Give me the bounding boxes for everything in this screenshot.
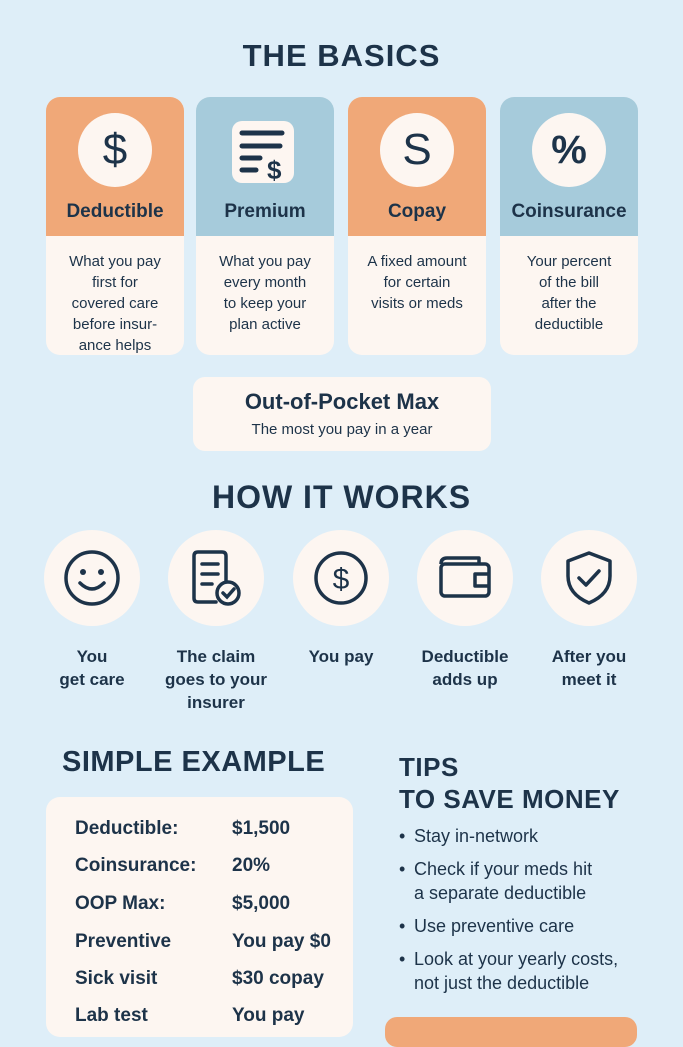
- tip 3: •: [399, 916, 405, 936]
- card: coinsurance: of the bill: [539, 274, 599, 291]
- card: premium: Premium: [224, 201, 306, 222]
- tip 2: Check if your meds hit: [414, 859, 592, 879]
- card: coinsurance: [500, 97, 638, 355]
- card: copay: S: [402, 125, 432, 174]
- row: oop max: OOP Max:: [75, 893, 165, 914]
- step: after you meet it: meet it: [562, 670, 616, 689]
- card: copay: Copay: [388, 201, 446, 222]
- step: claim: insurer: [187, 693, 245, 712]
- step: deductible adds up: adds up: [432, 670, 498, 689]
- row: lab test: [75, 1005, 304, 1026]
- card: deductible: covered care: [72, 295, 158, 312]
- row: coinsurance: [75, 855, 270, 876]
- step: claim: goes to your: [165, 670, 267, 689]
- title: the basics: THE BASICS: [243, 38, 440, 73]
- tip 4: Look at your yearly costs,: [414, 949, 618, 969]
- card: deductible: first for: [92, 274, 138, 291]
- card: premium: [196, 97, 334, 355]
- card: premium: to keep your: [224, 295, 306, 312]
- text: $1,500: [232, 818, 290, 839]
- card: premium: $: [267, 155, 282, 185]
- row: deductible: [75, 818, 290, 839]
- card: coinsurance: Your percent: [527, 253, 611, 270]
- tip 4: •: [399, 949, 405, 969]
- card: copay: [348, 97, 486, 355]
- card: copay: A fixed amount: [367, 253, 467, 270]
- orange box bottom: [385, 1017, 637, 1047]
- text: $30 copay: [232, 968, 324, 989]
- row: sick visit: [75, 968, 324, 989]
- text: You pay $0: [232, 931, 331, 952]
- row: coinsurance: Coinsurance:: [75, 855, 196, 876]
- row: sick visit: Sick visit: [75, 968, 157, 989]
- step: you pay: $: [333, 563, 350, 596]
- step: after you meet it: After you: [552, 647, 626, 666]
- card: deductible: before insur-: [73, 316, 157, 333]
- card: deductible: ance helps: [79, 337, 151, 354]
- card: deductible: $: [103, 125, 127, 174]
- panel: out-of-pocket max: [193, 377, 491, 451]
- card: premium: What you pay: [219, 253, 311, 270]
- step: you get care: get care: [59, 670, 125, 689]
- step: you pay: [293, 530, 389, 666]
- step: deductible adds up: [417, 530, 513, 689]
- panel: out-of-pocket max: Out-of-Pocket Max: [245, 389, 439, 414]
- card: deductible: [46, 97, 184, 355]
- card: coinsurance: %: [551, 128, 587, 172]
- text: You pay: [232, 1005, 304, 1026]
- title: tips: [399, 752, 620, 814]
- card: copay: visits or meds: [371, 295, 463, 312]
- step: deductible adds up: Deductible: [422, 647, 508, 666]
- step: claim: The claim: [177, 647, 255, 666]
- tip 1: •: [399, 826, 405, 846]
- tip 2: a separate deductible: [414, 883, 586, 903]
- step: claim: [165, 530, 267, 712]
- row: lab test: Lab test: [75, 1005, 148, 1026]
- step: you get care: You: [77, 647, 107, 666]
- card: coinsurance: Coinsurance: [511, 201, 627, 222]
- card: deductible: What you pay: [69, 253, 161, 270]
- tip 2: [399, 859, 592, 903]
- title: how it works: HOW IT WORKS: [212, 479, 471, 515]
- step: after you meet it: [541, 530, 637, 689]
- card: deductible: Deductible: [66, 201, 164, 222]
- tip 4: not just the deductible: [414, 973, 589, 993]
- card: premium: every month: [224, 274, 306, 291]
- card: coinsurance: deductible: [535, 316, 603, 333]
- row: oop max: [75, 893, 290, 914]
- title: simple example: SIMPLE EXAMPLE: [62, 746, 325, 778]
- tip 4: [399, 949, 618, 993]
- card: premium: plan active: [229, 316, 301, 333]
- tip 1: Stay in-network: [414, 826, 538, 846]
- row: preventive: Preventive: [75, 931, 171, 952]
- step: you get care: [44, 530, 140, 689]
- title: tips: TO SAVE MONEY: [399, 784, 620, 814]
- panel: example table: [46, 797, 353, 1037]
- panel: out-of-pocket max: The most you pay in a year: [252, 421, 432, 438]
- card: copay: for certain: [384, 274, 450, 291]
- step: you pay: You pay: [309, 647, 373, 666]
- text: 20%: [232, 855, 270, 876]
- card: coinsurance: after the: [541, 295, 597, 312]
- row: deductible: Deductible:: [75, 818, 178, 839]
- row: preventive: [75, 931, 331, 952]
- tip 3: Use preventive care: [414, 916, 574, 936]
- text: $5,000: [232, 893, 290, 914]
- title: tips: TIPS: [399, 752, 459, 782]
- tip 2: •: [399, 859, 405, 879]
